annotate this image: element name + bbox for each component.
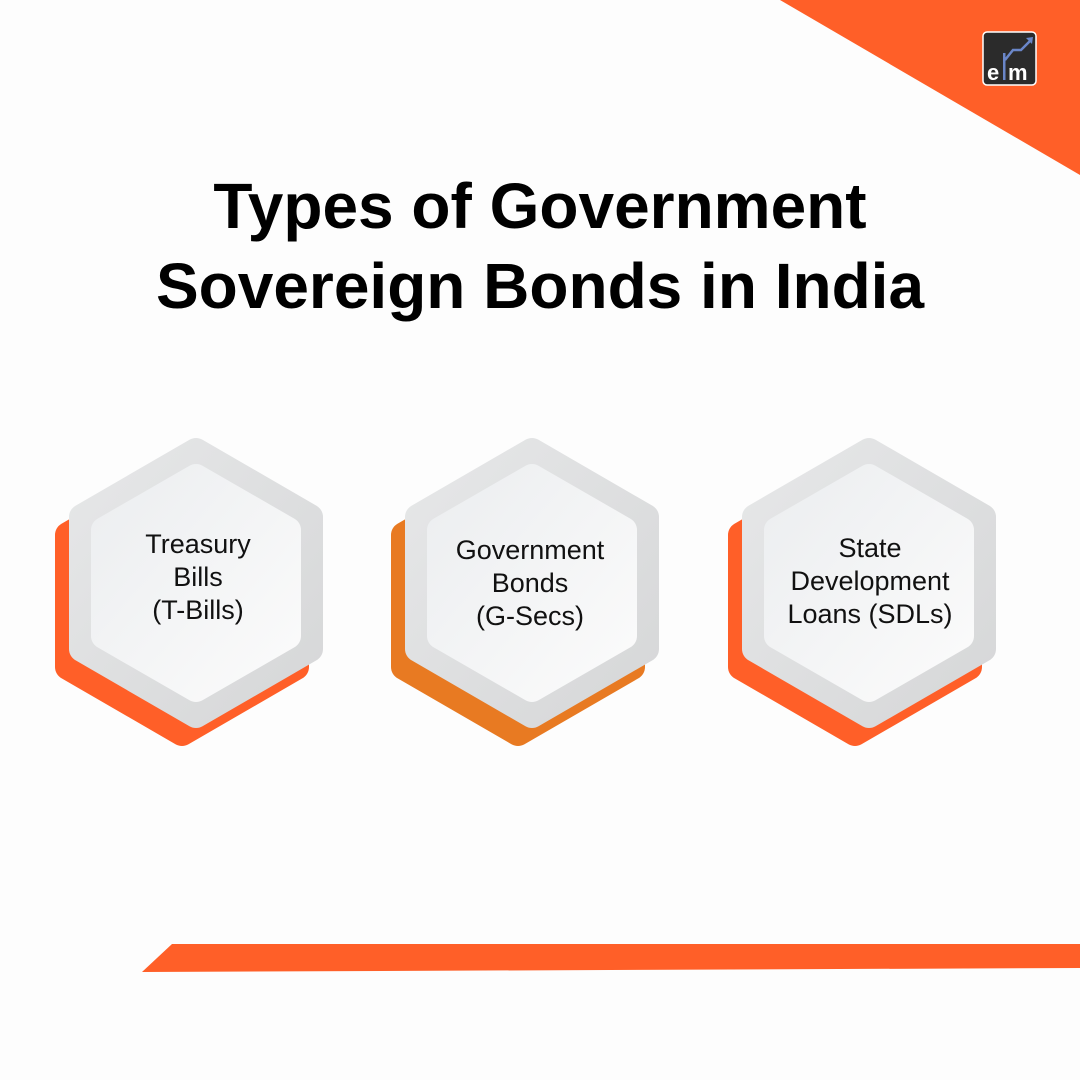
title: Types of Government: [213, 170, 867, 242]
label 1: Treasury: [145, 529, 251, 559]
logo: e: [987, 60, 999, 85]
hexagon 1: [68, 451, 310, 733]
label 3: State: [838, 533, 902, 563]
label 1: Bills: [173, 562, 223, 592]
title: Sovereign Bonds in India: [156, 250, 924, 322]
bottom orange stripe: [142, 944, 1080, 972]
hexagon 3: [741, 451, 983, 733]
label 2: Bonds: [492, 568, 568, 598]
logo: m: [1008, 60, 1028, 85]
label 3: Loans (SDLs): [787, 599, 953, 629]
title: [156, 170, 924, 322]
label 3: Development: [790, 566, 950, 596]
label 2: Government: [456, 535, 605, 565]
label 1: (T-Bills): [152, 595, 244, 625]
label 2: (G-Secs): [476, 601, 584, 631]
hexagon 2: [404, 451, 646, 733]
top-right orange triangle: [780, 0, 1080, 175]
logo: [983, 32, 1036, 85]
